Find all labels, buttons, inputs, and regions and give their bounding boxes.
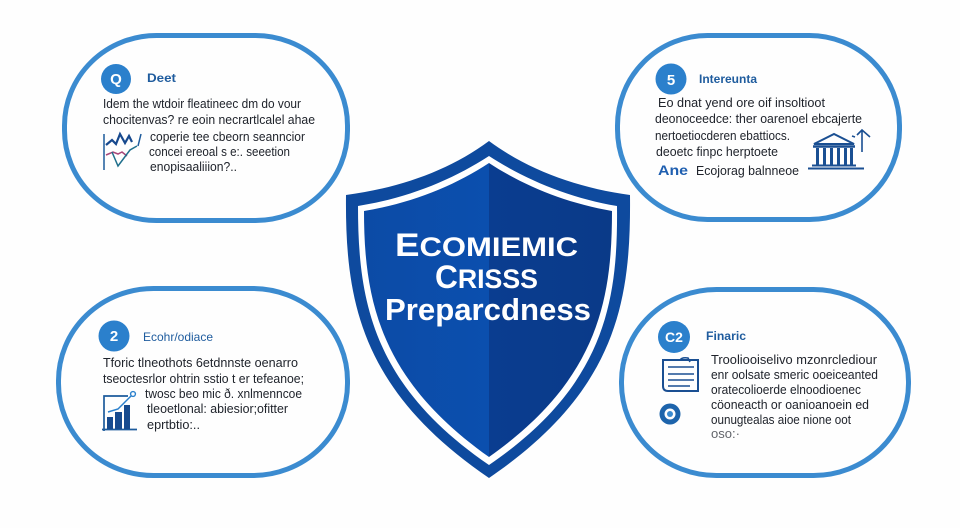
text block: exchange: eprtbtio:.. bbox=[147, 418, 200, 432]
panel: debt (top left) bbox=[64, 36, 348, 220]
text block: financial bbox=[711, 353, 878, 441]
text block: financial: oratecolioerde elnoodioenec bbox=[711, 383, 861, 397]
title bbox=[385, 227, 591, 327]
title: ECOMIEMIC bbox=[395, 227, 578, 263]
text block: interest: Eo dnat yend ore oif insoltioot bbox=[658, 96, 826, 110]
text block: interest: nertoetiocderen ebattiocs. bbox=[655, 129, 790, 143]
text block: financial: enr oolsate smeric ooeiceanted bbox=[711, 368, 878, 382]
icon: bar chart bbox=[102, 392, 137, 431]
number badge: financial bbox=[658, 321, 690, 353]
text block: exchange: Tforic tlneothots 6etdnnste oenarro bbox=[103, 356, 298, 370]
text block: interest bbox=[655, 96, 862, 178]
text block: financial: Trooliooiselivo mzonrclediour bbox=[711, 353, 877, 367]
number badge: debt: Q bbox=[110, 71, 122, 88]
text block: exchange: tseoctesrlor ohtrin sstio t er tefeanoe; bbox=[103, 372, 304, 386]
text block: debt: coperie tee cbeorn seanncior bbox=[150, 130, 305, 144]
number badge: debt bbox=[101, 64, 131, 94]
icon: wave mark: Ane bbox=[658, 162, 688, 178]
number badge: interest: 5 bbox=[667, 72, 675, 89]
panel: financial (bottom right) bbox=[622, 290, 908, 476]
title: Preparcdness bbox=[385, 292, 591, 327]
icon: line chart bbox=[104, 134, 141, 170]
number badge: interest bbox=[656, 64, 686, 94]
text block: debt: chocitenvas? re eoin necrartlcalel ahae bbox=[103, 113, 315, 127]
panel: exchange (bottom left) bbox=[58, 288, 348, 476]
text block: exchange: twosc beo mic ð. xnlmenncoe bbox=[145, 387, 302, 401]
icon: badge bbox=[660, 404, 680, 424]
text block: debt: concei ereoal s e:. seeetion bbox=[149, 145, 290, 159]
text block: financial: ounugtealas aioe nione oot bbox=[711, 413, 851, 427]
text block: financial: cöoneacth or oanioanoein ed bbox=[711, 398, 869, 412]
text block: interest: Ecojorag balnneoe bbox=[696, 164, 799, 178]
shield right face bbox=[489, 163, 612, 457]
title: CRISSS bbox=[435, 259, 538, 295]
text block: exchange: tleoetlonal: abiesior;ofitter bbox=[147, 402, 288, 416]
text block: debt bbox=[103, 97, 315, 174]
heading: debt: Deet bbox=[147, 71, 176, 85]
central shield with title bbox=[346, 141, 630, 478]
number badge: exchange: 2 bbox=[110, 328, 118, 345]
panel: interest (top right) bbox=[618, 36, 900, 220]
number badge: financial: C2 bbox=[665, 329, 683, 345]
icon: bank building with arrow bbox=[808, 130, 870, 168]
shield left face bbox=[364, 163, 489, 457]
text block: debt: enopisaaliiion?.. bbox=[150, 160, 237, 174]
text block: financial: oso:· bbox=[711, 427, 740, 441]
number badge: exchange bbox=[98, 320, 130, 352]
text block: debt: Idem the wtdoir fleatineec dm do vour bbox=[103, 97, 301, 111]
text block: interest: deoetc finpc herptoete bbox=[656, 145, 778, 159]
heading: exchange: Ecohr/odiace bbox=[143, 330, 213, 344]
heading: interest: Intereunta bbox=[699, 72, 757, 86]
shield white ring bbox=[358, 156, 617, 465]
text block: exchange bbox=[103, 356, 304, 432]
icon: document bbox=[663, 358, 698, 391]
shield outer frame bbox=[346, 141, 630, 478]
heading: financial: Finaric bbox=[706, 329, 746, 343]
text block: interest: deonoceedce: ther oarenoel ebcajerte bbox=[655, 112, 862, 126]
